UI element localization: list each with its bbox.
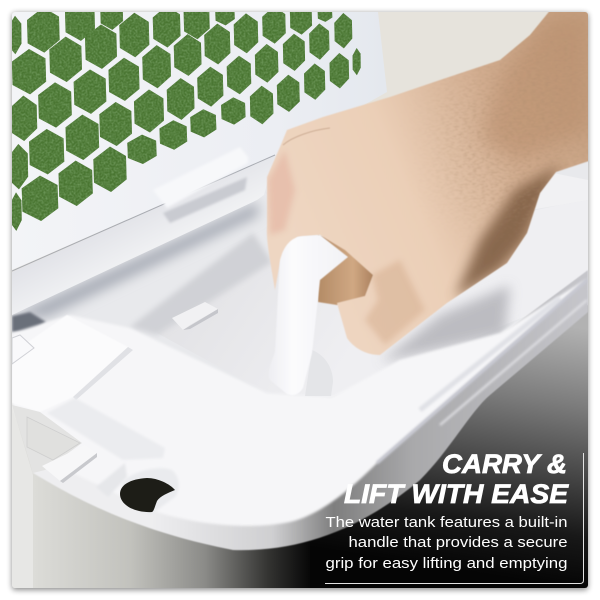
left corner strip [12,405,33,588]
caption body text: handle that provides a secure [348,534,568,551]
knuckle crease [283,128,330,145]
caption heading: CARRY & [442,449,567,479]
rim flat top [12,278,588,526]
door edge line [12,155,275,271]
skin shading [268,10,592,345]
caption heading: LIFT WITH EASE [344,479,569,509]
drain ridge [99,464,126,492]
tank front face left [12,400,312,590]
dark gap at left edge [12,312,46,332]
caption heading [344,449,569,509]
hand and forearm [267,8,592,355]
lower door lip [12,167,264,315]
water tank well floor [157,200,588,397]
shadow below the lip [12,202,258,318]
small clip tab [42,453,97,483]
tank deck under the door [12,154,588,390]
palm and arm [267,8,592,355]
pivot disk [305,350,333,396]
caption frame line [325,453,584,584]
caption body text: The water tank features a built-in [326,514,568,531]
raised ridge near drain [47,398,165,460]
caption body text [326,514,568,572]
tank handle [269,235,348,395]
hand shadow on well [380,285,510,362]
curled fingers behind handle [318,235,378,305]
filter door latch [162,149,248,224]
upper right tank corner [536,174,588,208]
honeycomb filter grille [12,12,378,232]
caption body text: grip for easy lifting and emptying [326,555,568,572]
tank front face right [310,305,588,588]
drain hole [120,478,175,512]
small well tab [172,302,218,330]
rim rounded side [20,270,588,550]
rim highlight streaks [377,280,587,463]
filter door panel [12,12,387,270]
left side wall [12,405,82,473]
raised clip platform [12,315,133,412]
drain recess [123,469,178,510]
side notch panel [27,417,80,460]
well back wall [130,233,272,335]
